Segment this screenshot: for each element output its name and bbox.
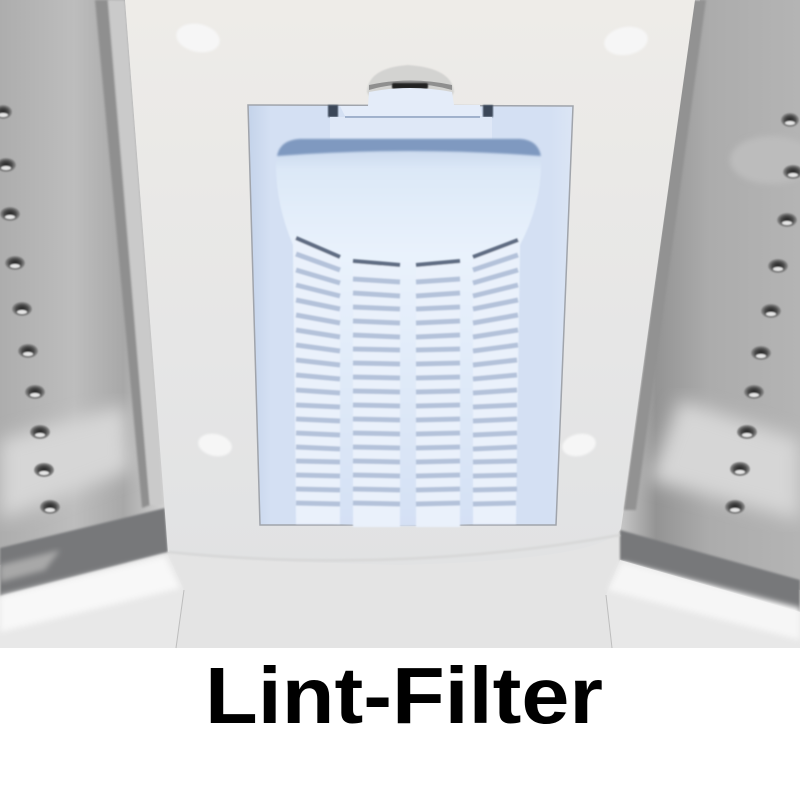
title: Lint-Filter — [205, 651, 603, 740]
left drum holes — [0, 105, 60, 514]
central panel — [125, 0, 695, 565]
lower white ledges — [0, 555, 800, 648]
mounting bumps — [174, 20, 650, 459]
left drum wall — [0, 0, 168, 596]
lint filter — [248, 65, 573, 527]
right drum holes — [725, 113, 800, 514]
filter frame — [248, 105, 573, 525]
right drum wall — [620, 0, 800, 612]
filter grille — [294, 236, 519, 527]
filter dome — [276, 139, 541, 526]
filter handle — [328, 65, 493, 139]
